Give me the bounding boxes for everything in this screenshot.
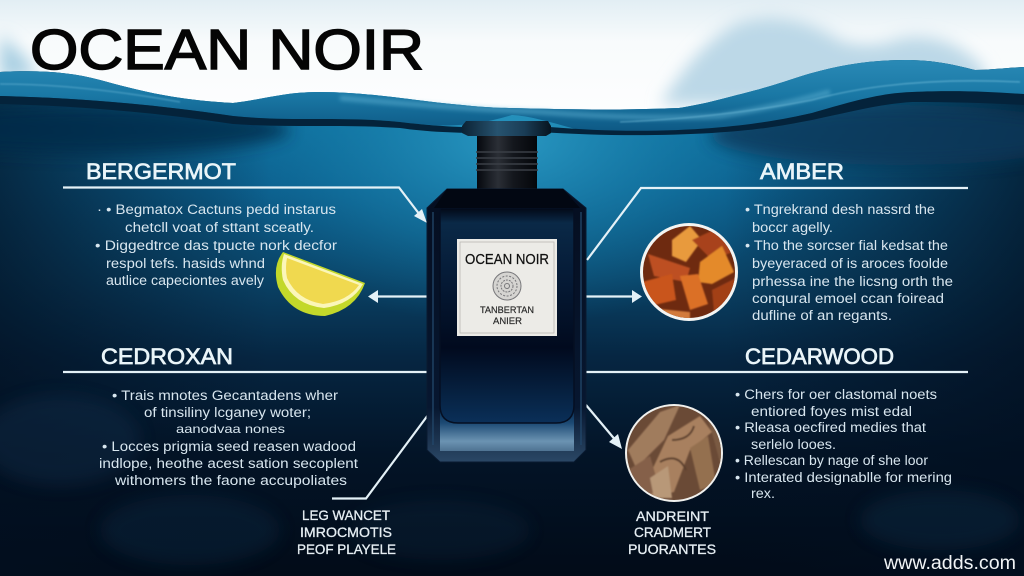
connector: bergamot to bottle <box>63 188 427 223</box>
bottle body <box>427 189 586 462</box>
heading: cedarwood: CEDARWOOD <box>745 344 894 369</box>
icon: cedarwood pieces <box>625 404 723 502</box>
caption: cedroxan: PEOF PLAYELE <box>297 542 396 557</box>
caption: cedarwood <box>628 509 716 557</box>
text block: cedroxan notes: indlope, heothe acest sation secoplent <box>99 456 358 471</box>
text block: cedroxan notes: • Trais mnotes Gecantadens wher <box>112 388 339 403</box>
text block: cedroxan notes: withomers the faone accupoliates <box>114 473 347 488</box>
text block: cedarwood notes: • Rleasa oecfired medies that <box>735 420 926 435</box>
text block: cedarwood notes: • Chers for oer clastomal noets <box>735 387 937 402</box>
text block: cedarwood notes: • Interated designablle for mering <box>735 470 952 485</box>
text block: amber notes: • Tho the sorcser fial kedsat the <box>745 238 948 253</box>
text block: cedroxan notes: of tinsiliny lcganey woter; <box>144 405 311 420</box>
text block: cedroxan notes <box>99 388 358 488</box>
label: OCEAN NOIR <box>465 251 549 268</box>
label: TANBERTAN <box>480 305 534 316</box>
text block: cedarwood notes: • Rellescan by nage of she loor <box>735 453 929 468</box>
caption: cedarwood: PUORANTES <box>628 542 716 557</box>
caption: cedroxan: IMROCMOTIS <box>300 525 392 540</box>
water surface wave <box>0 60 1024 135</box>
bottle side glass highlights <box>433 212 581 445</box>
perfume bottle <box>427 121 586 462</box>
panel: bergamot <box>63 159 427 316</box>
panel: cedroxan <box>63 344 428 557</box>
text block: cedarwood notes <box>735 387 952 501</box>
text block: bergamot notes: autlice capeciontes avely <box>106 273 264 288</box>
caption: cedroxan: LEG WANCET <box>302 508 390 523</box>
text block: amber notes: dufline of an regants. <box>752 308 892 323</box>
panel: amber <box>586 159 968 323</box>
text block: cedarwood notes: serlelo looes. <box>751 437 836 452</box>
website url: www.adds.com <box>883 553 1016 574</box>
arrow: bottle to cedarwood <box>586 405 622 449</box>
caption: cedarwood: ANDREINT <box>636 509 709 524</box>
heading: cedroxan: CEDROXAN <box>101 344 233 369</box>
text block: bergamot notes: respol tefs. hasids whnd <box>106 256 265 271</box>
text block: amber notes: • Tngrekrand desh nassrd the <box>745 202 935 217</box>
caption: cedroxan <box>297 508 396 557</box>
heading: bergamot: BERGERMOT <box>86 159 236 184</box>
arrow: bottle to amber <box>586 290 642 303</box>
emblem <box>493 272 521 300</box>
text block: bergamot notes: chetcll voat of sttant sceatly. <box>125 220 314 235</box>
bottle cap <box>462 121 551 136</box>
icon: amber pieces <box>640 223 738 322</box>
text block: cedroxan notes: • Locces prigmia seed reasen wadood <box>102 439 356 454</box>
panel: cedarwood <box>586 344 968 557</box>
label: ANIER <box>493 316 522 327</box>
text block: amber notes: prhessa ine the licsng orth the <box>752 274 953 289</box>
caption: cedarwood: CRADMERT <box>634 525 711 540</box>
text block: bergamot notes <box>95 202 338 288</box>
text block: cedroxan notes: aanodvaa nones <box>176 422 285 436</box>
connector: bottle to caption <box>332 415 428 498</box>
glass base <box>440 412 574 451</box>
text block: amber notes: boccr agelly. <box>752 220 833 235</box>
heading: amber: AMBER <box>760 159 844 184</box>
bottle shoulder <box>434 189 580 208</box>
text block: bergamot notes: · • Begmatox Cactuns pedd instarus <box>97 202 336 217</box>
bottle neck <box>476 134 538 190</box>
text block: amber notes: byeyeraced of is aroces foolde <box>752 256 948 271</box>
text block: amber notes <box>745 202 953 323</box>
label <box>457 239 557 336</box>
text block: amber notes: conqural emoel ccan foiread <box>752 291 944 306</box>
divider line: cedarwood <box>586 371 968 373</box>
title: OCEAN NOIR <box>30 18 424 82</box>
text block: cedarwood notes: entiored foyes mist edal <box>751 404 912 419</box>
connector: amber to bottle <box>587 188 968 260</box>
bottle liquid <box>440 208 574 423</box>
text block: bergamot notes: • Diggedtrce das tpucte nork decfor <box>95 238 338 253</box>
text block: cedarwood notes: rex. <box>751 486 775 501</box>
divider line: cedroxan <box>63 371 428 373</box>
icon: lime wedge <box>276 252 365 316</box>
arrow: bottle to lime <box>368 290 427 303</box>
